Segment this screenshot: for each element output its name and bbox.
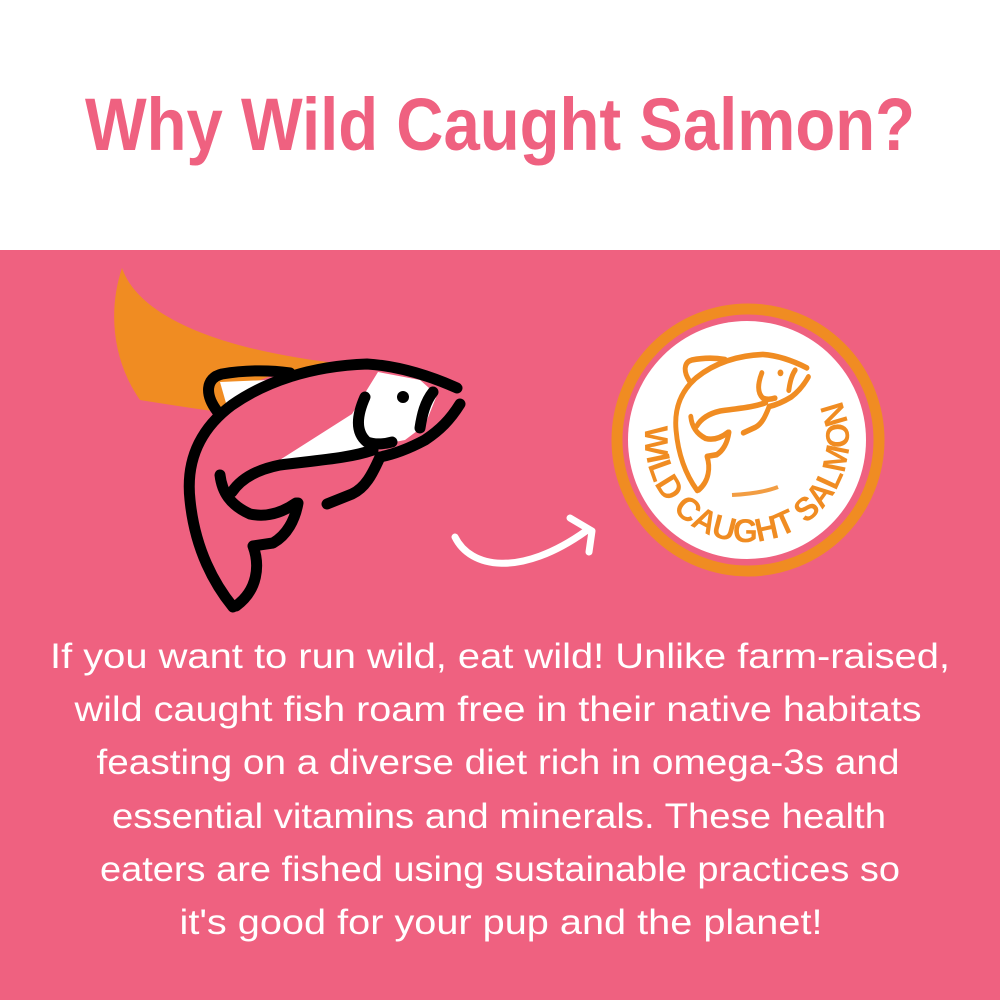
icon: leaping salmon — [189, 364, 460, 607]
text block: description: it's good for your pup and the planet! — [180, 903, 822, 942]
decoration: brush stroke — [732, 487, 778, 495]
badge: wild caught salmon — [612, 304, 884, 576]
badge text: WILD CAUGHT SALMON — [644, 402, 850, 542]
text block: description: feasting on a diverse diet rich in omega-3s and — [96, 743, 899, 782]
text block: description: essential vitamins and minerals. These health — [112, 797, 886, 836]
text block: description — [50, 637, 950, 942]
icon: orange swoosh — [114, 268, 345, 412]
panel: pink background — [0, 250, 1000, 1000]
text block: description: wild caught fish roam free in their native habitats — [73, 690, 922, 729]
arrow — [455, 518, 592, 563]
text block: description: If you want to run wild, eat wild! Unlike farm-raised, — [50, 637, 950, 676]
text block: description: eaters are fished using sustainable practices so — [100, 850, 900, 889]
title: Why Wild Caught Salmon? — [85, 83, 915, 166]
icon: badge fish — [676, 354, 808, 491]
